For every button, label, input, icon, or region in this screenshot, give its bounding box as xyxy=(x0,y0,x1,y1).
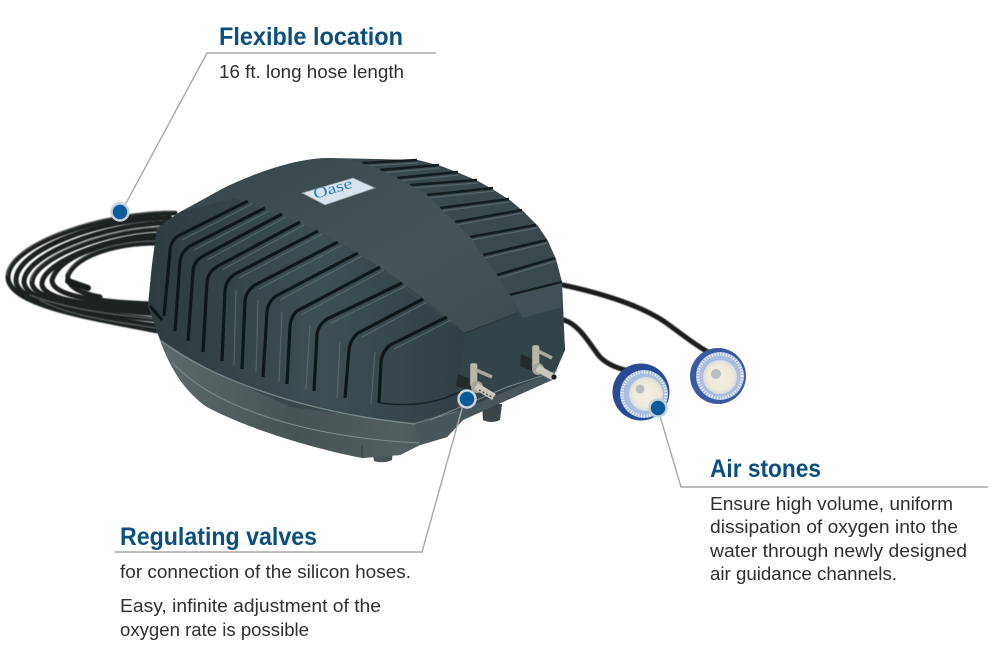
front air stone xyxy=(612,364,670,420)
logo plate: Oase xyxy=(311,176,355,203)
callout: air stones xyxy=(650,400,988,584)
callout: flexible location xyxy=(112,23,436,220)
right valve xyxy=(520,345,557,380)
regulating valves fittings xyxy=(456,345,557,398)
feet xyxy=(372,450,393,462)
body text: oxygen rate is possible xyxy=(120,620,309,640)
pump body xyxy=(148,158,565,462)
side wall xyxy=(455,300,565,412)
body text: water through newly designed xyxy=(709,541,967,561)
right lower band xyxy=(415,372,552,445)
front ribs xyxy=(164,201,447,403)
body text: Ensure high volume, uniform xyxy=(710,494,953,514)
marker xyxy=(650,400,666,416)
air stone hoses xyxy=(563,285,708,370)
callout: regulating valves xyxy=(115,390,476,640)
heading: Regulating valves xyxy=(120,523,317,551)
body text: dissipation of oxygen into the xyxy=(710,517,958,537)
leader line xyxy=(660,416,988,487)
left valve xyxy=(456,363,494,398)
body text xyxy=(709,494,967,584)
heading: Air stones xyxy=(710,455,821,483)
body text xyxy=(120,562,411,640)
body text: Easy, infinite adjustment of the xyxy=(120,596,381,616)
body text: air guidance channels. xyxy=(710,564,897,584)
logo plate xyxy=(302,176,375,205)
silhouette xyxy=(148,158,565,458)
marker xyxy=(112,204,128,220)
rear air stone xyxy=(690,348,746,404)
base lip xyxy=(160,340,463,458)
air stones xyxy=(612,348,746,420)
leader line xyxy=(125,53,436,205)
marker xyxy=(458,390,476,408)
dome top xyxy=(220,158,518,333)
hose coil xyxy=(7,211,175,331)
body text: for connection of the silicon hoses. xyxy=(120,562,411,582)
rear ribs xyxy=(362,160,562,295)
lower front edges xyxy=(150,306,162,320)
leader line xyxy=(115,405,463,552)
body text: 16 ft. long hose length xyxy=(219,62,404,82)
hose open end xyxy=(68,281,88,288)
corner facet xyxy=(510,283,562,318)
front panel xyxy=(148,198,465,422)
heading: Flexible location xyxy=(219,23,403,51)
